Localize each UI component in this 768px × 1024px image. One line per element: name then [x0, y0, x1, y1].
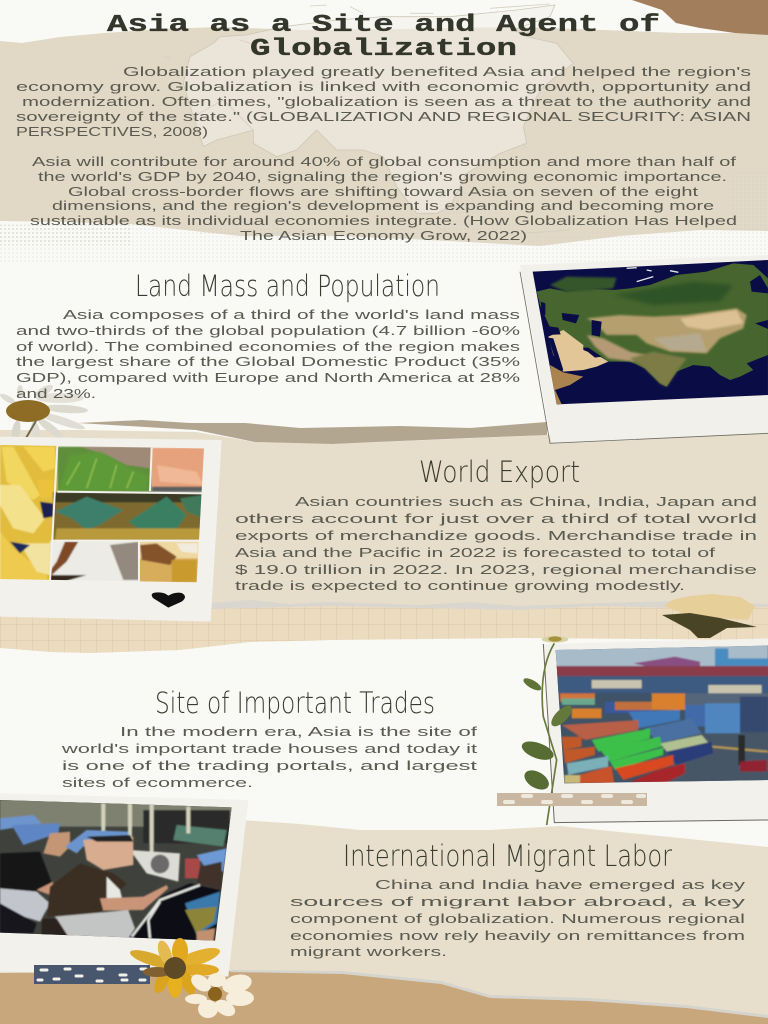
- text: land mass: GDP), compared with Europe and North America at 28%: [16, 370, 521, 385]
- washi tape: navy hearts: [34, 965, 150, 984]
- text: world export: [235, 494, 757, 593]
- text: land mass: the largest share of the Global Domestic Product (35%: [16, 354, 521, 369]
- text: site of important trades: world's important trade houses and today it: [60, 741, 478, 756]
- photo: coconut and oil: [139, 542, 199, 583]
- text: international migrant labor: [290, 877, 746, 959]
- heading: world export: World Export: [419, 455, 580, 489]
- photo: bananas: [0, 443, 57, 582]
- photo: shrimp: [152, 448, 205, 492]
- text: site of important trades: is one of the trading portals, and largest: [62, 758, 478, 773]
- text: site of important trades: In the modern era, Asia is the site of: [120, 724, 478, 739]
- intro paragraph 2: [30, 154, 737, 243]
- text: world export: Asian countries such as China, India, Japan and: [295, 494, 757, 509]
- flower: sunflower: [128, 938, 222, 998]
- photo: fern: [57, 447, 152, 492]
- heading: land mass: Land Mass and Population: [135, 269, 440, 303]
- world map watermark: [163, 4, 573, 233]
- heading: international migrant labor: International Migrant Labor: [343, 839, 672, 873]
- text: world export: trade is expected to continue growing modestly.: [235, 578, 685, 593]
- flower: white flower: [185, 971, 254, 1020]
- polaroid: asia satellite map: [520, 255, 768, 444]
- intro paragraph 1: PERSPECTIVES, 2008): [16, 124, 208, 139]
- washi tape: hearts: [497, 793, 647, 806]
- intro paragraph 2: Asia will contribute for around 40% of global consumption and more than half of: [32, 154, 737, 169]
- intro paragraph 2: dimensions, and the region's development is expanding and becoming more: [52, 198, 714, 213]
- photo: pineapples: [53, 492, 203, 541]
- title: Globalization: [250, 36, 517, 63]
- intro paragraph 2: The Asian Economy Grow, 2022): [240, 228, 527, 243]
- text: land mass: of world). The combined economies of the region makes: [16, 339, 521, 354]
- polaroid: asian export goods collage: [0, 437, 222, 622]
- text: world export: Asia and the Pacific in 2022 is forecasted to total of: [235, 545, 716, 560]
- text: world export: $ 19.0 trillion in 2022. In 2023, regional merchandise: [235, 562, 757, 577]
- intro paragraph 2: Global cross-border flows are shifting toward Asia on seven of the eight: [68, 184, 699, 199]
- torn brown paper corner: [632, 0, 768, 35]
- intro paragraph 2: sustainable as its individual economies integrate. (How Globalization Has Helped: [30, 213, 737, 228]
- intro paragraph 1: [16, 64, 752, 139]
- photo: coconut flakes: [50, 541, 139, 581]
- text: site of important trades: sites of ecommerce.: [62, 775, 253, 790]
- text: land mass: and 23%.: [16, 386, 96, 401]
- flower: pressed dried flower: [662, 594, 757, 638]
- icon: black heart: [152, 592, 185, 608]
- polaroid: shipping containers: [543, 638, 768, 823]
- text: land mass: [16, 307, 521, 401]
- polaroid: garment workers: [0, 793, 248, 977]
- text: world export: others account for just over a third of total world: [235, 511, 757, 526]
- intro paragraph 1: modernization. Often times, "globalization is seen as a threat to the authority and: [22, 94, 751, 109]
- intro paragraph 1: Globalization played greatly benefited Asia and helped the region's: [123, 64, 752, 79]
- text: land mass: and two-thirds of the global population (4.7 billion -60%: [16, 323, 521, 338]
- title: [107, 12, 660, 63]
- text: international migrant labor: component of globalization. Numerous regional: [290, 911, 745, 926]
- text: international migrant labor: economies now rely heavily on remittances from: [290, 928, 745, 943]
- title: Asia as a Site and Agent of: [107, 12, 660, 39]
- torn brown strip: [78, 420, 547, 444]
- intro paragraph 2: the world's GDP by 2040, signaling the region's growing economic importance.: [38, 169, 727, 184]
- text: site of important trades: [60, 724, 478, 790]
- text: international migrant labor: China and India have emerged as key: [375, 877, 746, 892]
- text: land mass: Asia composes of a third of the world's land mass: [63, 307, 521, 322]
- pressed plant stem: [519, 636, 575, 825]
- text: world export: exports of merchandize goods. Merchandise trade in: [235, 528, 757, 543]
- flower: daisy: [0, 383, 88, 443]
- text: international migrant labor: sources of migrant labor abroad, a key: [290, 894, 746, 909]
- text: international migrant labor: migrant workers.: [290, 944, 447, 959]
- heading: site of important trades: Site of Important Trades: [155, 686, 435, 720]
- intro paragraph 1: economy grow. Globalization is linked with economic growth, opportunity and: [16, 79, 751, 94]
- dotted city skyline texture: [0, 170, 768, 245]
- intro paragraph 1: sovereignty of the state." (GLOBALIZATION AND REGIONAL SECURITY: ASIAN: [16, 109, 751, 124]
